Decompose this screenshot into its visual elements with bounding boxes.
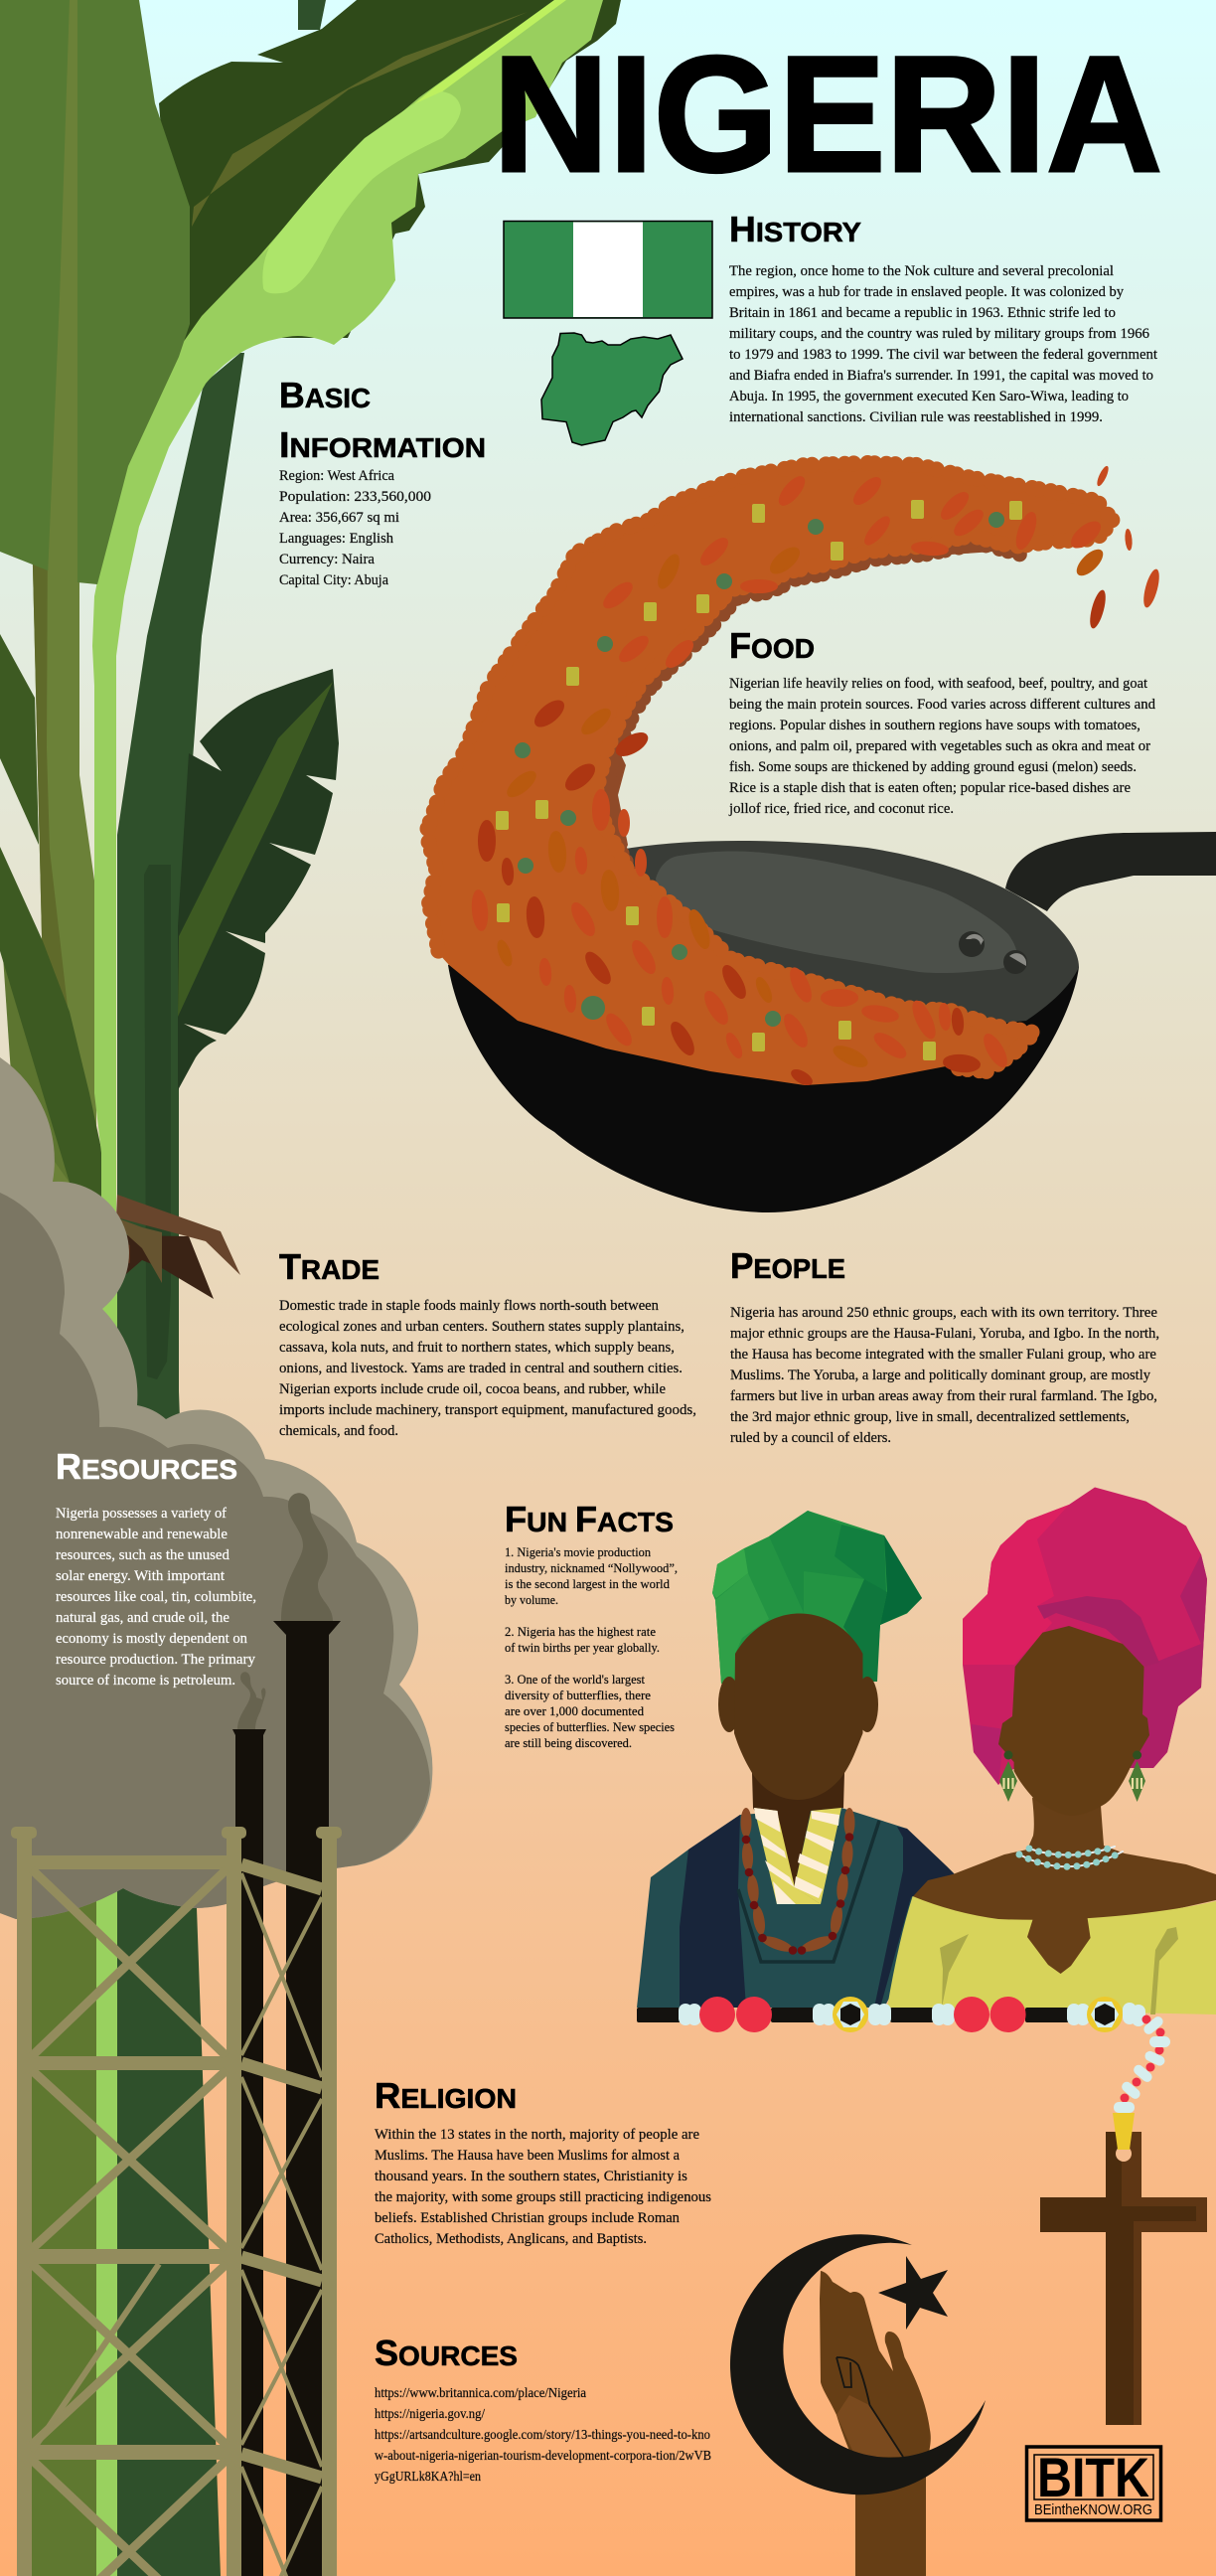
text: basic information [279, 468, 431, 588]
flag of Nigeria [504, 221, 712, 318]
big left leaf [0, 0, 190, 584]
text: sources: https://www.britannica.com/place/Nigeria [375, 2385, 586, 2400]
heading: basic information: INFORMATION [279, 424, 486, 465]
text: fun facts: 1. Nigeria's movie production [505, 1545, 652, 1559]
text: people: the 3rd major ethnic group, live in small, decentralized settlements, [730, 1409, 1130, 1425]
text: food: Rice is a staple dish that is eaten often; popular rice-based dishes are [729, 780, 1131, 796]
text: basic information: Area: 356,667 sq mi [279, 510, 399, 526]
heading: fun facts: FUN FACTS [505, 1499, 674, 1539]
jollof rice [426, 463, 1162, 1087]
text: food [728, 676, 1156, 817]
text: basic information: Population: 233,560,000 [279, 489, 431, 505]
text: food: fish. Some soups are thickened by adding ground egusi (melon) seeds. [729, 759, 1137, 775]
oil rig truss [11, 1827, 342, 2576]
text: sources: https://nigeria.gov.ng/ [375, 2406, 485, 2421]
text: history: and Biafra ended in Biafra's surrender. In 1991, the capital was moved to [729, 368, 1153, 384]
text: religion: Within the 13 states in the north, majority of people are [375, 2127, 699, 2143]
map of Nigeria [541, 333, 683, 445]
heading: history: HISTORY [729, 209, 861, 249]
text: fun facts: are over 1,000 documented [505, 1704, 645, 1718]
text: religion [375, 2127, 711, 2247]
text: resources: source of income is petroleum. [56, 1673, 235, 1689]
text: trade: onions, and livestock. Yams are traded in central and southern cities. [279, 1361, 683, 1376]
text: food: jollof rice, fried rice, and coconut rice. [728, 801, 954, 817]
text: basic information: Currency: Naira [279, 552, 376, 567]
light green leaf [92, 0, 603, 1212]
pan rivets [959, 931, 985, 957]
heading: sources: SOURCES [375, 2333, 518, 2373]
woman's pearl necklace [1019, 1847, 1123, 1866]
man's robe [637, 1808, 955, 2008]
woman's magenta headwrap [963, 1487, 1207, 1785]
dark upper leaf [159, 0, 621, 357]
text: fun facts: 2. Nigeria has the highest rate [505, 1625, 656, 1639]
text: religion: beliefs. Established Christian groups include Roman [375, 2210, 681, 2226]
cross [1040, 2132, 1207, 2425]
text: sources: yGgURLk8KA?hl=en [375, 2469, 481, 2484]
pendant tube [1113, 2113, 1135, 2162]
text: basic information: Region: West Africa [279, 468, 395, 484]
heading: people: PEOPLE [730, 1245, 845, 1286]
left leaves [0, 634, 39, 845]
text: fun facts: 3. One of the world's largest [505, 1673, 646, 1687]
woman's yellow dress [887, 1896, 1216, 2014]
text: religion: Muslims. The Hausa have been Muslims for almost a [375, 2148, 681, 2164]
text: fun facts [505, 1545, 678, 1750]
text: resources: resources, such as the unused [56, 1547, 230, 1563]
text: food: regions. Popular dishes in southern regions have soups with tomatoes, [729, 718, 1140, 733]
text: resources: resources like coal, tin, columbite, [56, 1589, 256, 1605]
BITK logo: BITK [1037, 2446, 1149, 2508]
text: trade: cassava, kola nuts, and fruit to northern states, which supply beans, [279, 1340, 675, 1356]
pan handle [1005, 832, 1216, 911]
text: food: being the main protein sources. Food varies across different cultures and [729, 697, 1156, 713]
text: people: ruled by a council of elders. [730, 1430, 891, 1446]
text: fun facts: by volume. [505, 1593, 558, 1607]
text: history: military coups, and the country was ruled by military groups from 1966 [729, 326, 1149, 342]
text: fun facts: diversity of butterflies, there [505, 1689, 651, 1702]
text: trade: chemicals, and food. [279, 1423, 398, 1439]
text: history: international sanctions. Civilian rule was reestablished in 1999. [729, 409, 1103, 425]
chimneys [232, 1621, 341, 2576]
text: fun facts: are still being discovered. [505, 1736, 632, 1750]
text: religion: Catholics, Methodists, Anglicans, and Baptists. [375, 2231, 647, 2247]
man's necklace [741, 1808, 854, 1955]
text: trade: Nigerian exports include crude oil, cocoa beans, and rubber, while [279, 1381, 666, 1397]
heading: food: FOOD [729, 625, 815, 666]
man's collar [754, 1808, 841, 1904]
text: resources: solar energy. With important [56, 1568, 225, 1584]
text: sources: https://artsandculture.google.com/story/13-things-you-need-to-kno [375, 2427, 710, 2442]
smoke puffs [281, 1493, 333, 1621]
text: basic information: Capital City: Abuja [279, 572, 389, 588]
text: history [729, 263, 1157, 425]
text: food: Nigerian life heavily relies on food, with seafood, beef, poultry, and goat [729, 676, 1147, 692]
text: trade: imports include machinery, transport equipment, manufactured goods, [279, 1402, 696, 1418]
pan bowl [448, 894, 1079, 1212]
text: trade: ecological zones and urban centers. Southern states supply plantains, [279, 1319, 684, 1335]
text: trade: Domestic trade in staple foods mainly flows north-south between [279, 1298, 660, 1314]
text: people: the Hausa has become integrated with the smaller Fulani group, who are [730, 1347, 1156, 1363]
text: people: farmers but live in urban areas away from their rural farmland. The Igbo, [730, 1388, 1157, 1404]
hand [820, 2271, 931, 2576]
banana plant [0, 0, 621, 2576]
text: history: to 1979 and 1983 to 1999. The civil war between the federal government [729, 347, 1157, 363]
text: people: Muslims. The Yoruba, a large and politically dominant group, are mostly [730, 1368, 1151, 1383]
roots [112, 1235, 214, 1299]
text: trade [279, 1298, 696, 1439]
herbs [515, 512, 1004, 1027]
text: history: Britain in 1861 and became a republic in 1963. Ethnic strife led to [729, 305, 1116, 321]
text: people: Nigeria has around 250 ethnic groups, each with its own territory. Three [730, 1305, 1157, 1321]
text: resources: nonrenewable and renewable [56, 1527, 228, 1542]
BITK logo: BEintheKNOW.ORG [1034, 2501, 1152, 2518]
bead strip [637, 1997, 1170, 2113]
flying grains [1072, 465, 1162, 630]
frying pan [448, 832, 1216, 1212]
text: people [730, 1305, 1159, 1446]
man's green hat [712, 1511, 922, 1686]
heading: resources: RESOURCES [56, 1446, 237, 1487]
text: history: empires, was a hub for trade in enslaved people. It was colonized by [729, 284, 1125, 300]
heading: trade: TRADE [279, 1246, 380, 1287]
text: fun facts: of twin births per year globally. [505, 1641, 660, 1655]
text: religion: thousand years. In the southern states, Christianity is [375, 2169, 687, 2184]
heading: religion: RELIGION [375, 2075, 517, 2116]
text: sources: w-about-nigeria-nigerian-tourism-development-corpora-tion/2wVB [375, 2448, 711, 2463]
text: food: onions, and palm oil, prepared with vegetables such as okra and meat or [729, 738, 1150, 754]
woman's earrings [999, 1751, 1145, 1802]
text: resources [56, 1506, 256, 1689]
crescent and star [730, 2234, 986, 2495]
peppers [496, 500, 1022, 1060]
man's neck [752, 1773, 844, 1887]
lower dark leaf [178, 669, 339, 1090]
olive stems [32, 527, 96, 2576]
dark stem [117, 353, 244, 2576]
text: history: The region, once home to the Nok culture and several precolonial [729, 263, 1114, 279]
man's head [718, 1614, 878, 1800]
smoke cloud [0, 1057, 432, 1919]
woman's head [998, 1626, 1149, 1816]
text: fun facts: species of butterflies. New species [505, 1720, 675, 1734]
woman's shoulders [913, 1798, 1216, 1928]
text: resources: economy is mostly dependent on [56, 1631, 248, 1647]
text: sources [375, 2385, 711, 2484]
text: resources: natural gas, and crude oil, the [56, 1610, 229, 1626]
rice grains [471, 473, 1104, 1069]
text: resources: resource production. The primary [56, 1652, 256, 1668]
text: fun facts: industry, nicknamed “Nollywood”, [505, 1561, 678, 1575]
text: people: major ethnic groups are the Hausa-Fulani, Yoruba, and Igbo. In the north, [730, 1326, 1159, 1342]
woman figure [887, 1487, 1216, 2014]
heading: basic information [279, 375, 486, 465]
title: NIGERIA [493, 23, 1162, 207]
text: religion: the majority, with some groups still practicing indigenous [375, 2189, 711, 2205]
text: history: Abuja. In 1995, the government executed Ken Saro-Wiwa, leading to [729, 389, 1129, 404]
red and pale bead string [1114, 2014, 1170, 2113]
text: basic information: Languages: English [279, 531, 394, 547]
text: resources: Nigeria possesses a variety of [56, 1506, 227, 1522]
pan interior [596, 841, 1079, 1034]
heading: basic information: BASIC [279, 375, 371, 415]
man figure [637, 1511, 955, 2008]
text: fun facts: is the second largest in the world [505, 1577, 671, 1591]
